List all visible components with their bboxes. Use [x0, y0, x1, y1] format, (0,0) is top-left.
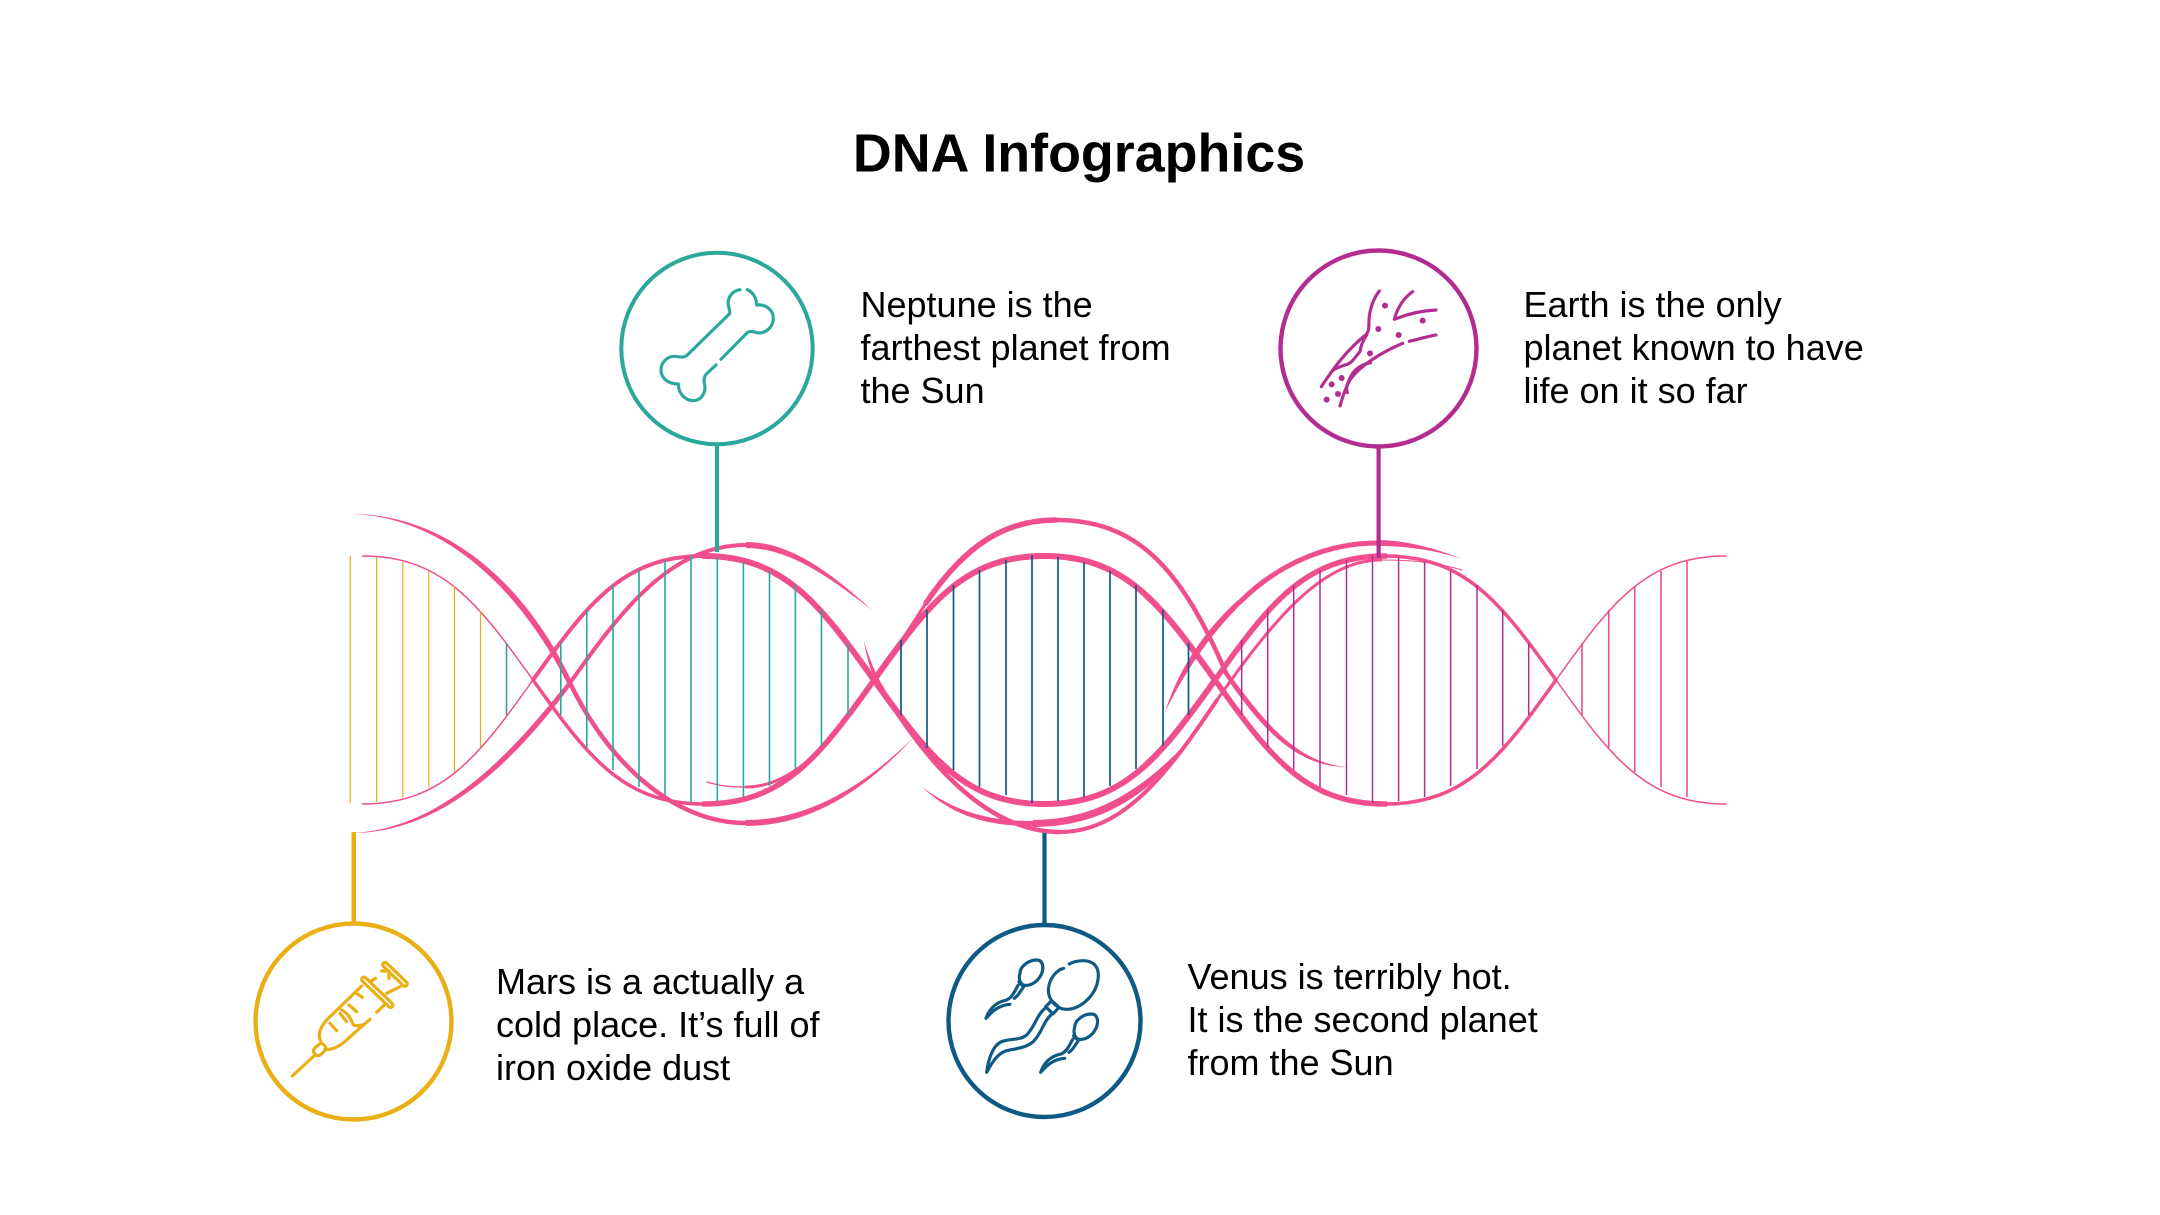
title: DNA Infographics [853, 124, 1305, 184]
text block: Earth: life on it so far [1524, 370, 1748, 411]
connector: teal [715, 444, 719, 552]
text block: Earth: planet known to have [1524, 327, 1864, 368]
gold base pairs [350, 556, 480, 803]
teal base pairs [506, 555, 848, 803]
text block: Neptune: Neptune is the [860, 284, 1093, 325]
text block: Mars: Mars is a actually a [496, 961, 805, 1002]
connector: gold [352, 832, 356, 922]
text block: Neptune: the Sun [860, 370, 985, 411]
text block: Mars: iron oxide dust [496, 1047, 730, 1088]
icon: syringe [292, 962, 408, 1076]
icon: bone [661, 290, 773, 401]
icon badge: blood vessel [1280, 250, 1476, 446]
icon badge: syringe [256, 924, 452, 1120]
icon badge: bone [621, 253, 813, 444]
pink base pairs [1582, 561, 1687, 797]
purple base pairs [1242, 555, 1529, 803]
main strand A [362, 556, 1726, 804]
text block: Neptune: farthest planet from [860, 327, 1171, 368]
icon: sperm cells [986, 960, 1098, 1072]
text block: Venus: from the Sun [1188, 1042, 1394, 1083]
outer strand 6 [1165, 540, 1462, 712]
icon: blood vessel [1321, 291, 1436, 406]
icon badge: sperm cells [948, 925, 1140, 1117]
DNA helix [350, 514, 1726, 833]
outer strand 3 [707, 520, 1347, 787]
outer strand 4 [864, 560, 1462, 832]
text block: Mars: cold place. It’s full of [496, 1004, 821, 1045]
outer strand 5 [922, 730, 1198, 827]
main strand B [362, 556, 1726, 804]
connector: purple [1376, 447, 1381, 558]
text block: Earth: Earth is the only [1524, 284, 1782, 325]
text block: Venus: It is the second planet [1188, 999, 1538, 1040]
outer strand 2 [352, 542, 872, 833]
navy base pairs [901, 555, 1188, 803]
connector: navy [1042, 833, 1047, 925]
outer strand 1 [352, 514, 914, 826]
text block: Venus: Venus is terribly hot. [1188, 956, 1512, 997]
